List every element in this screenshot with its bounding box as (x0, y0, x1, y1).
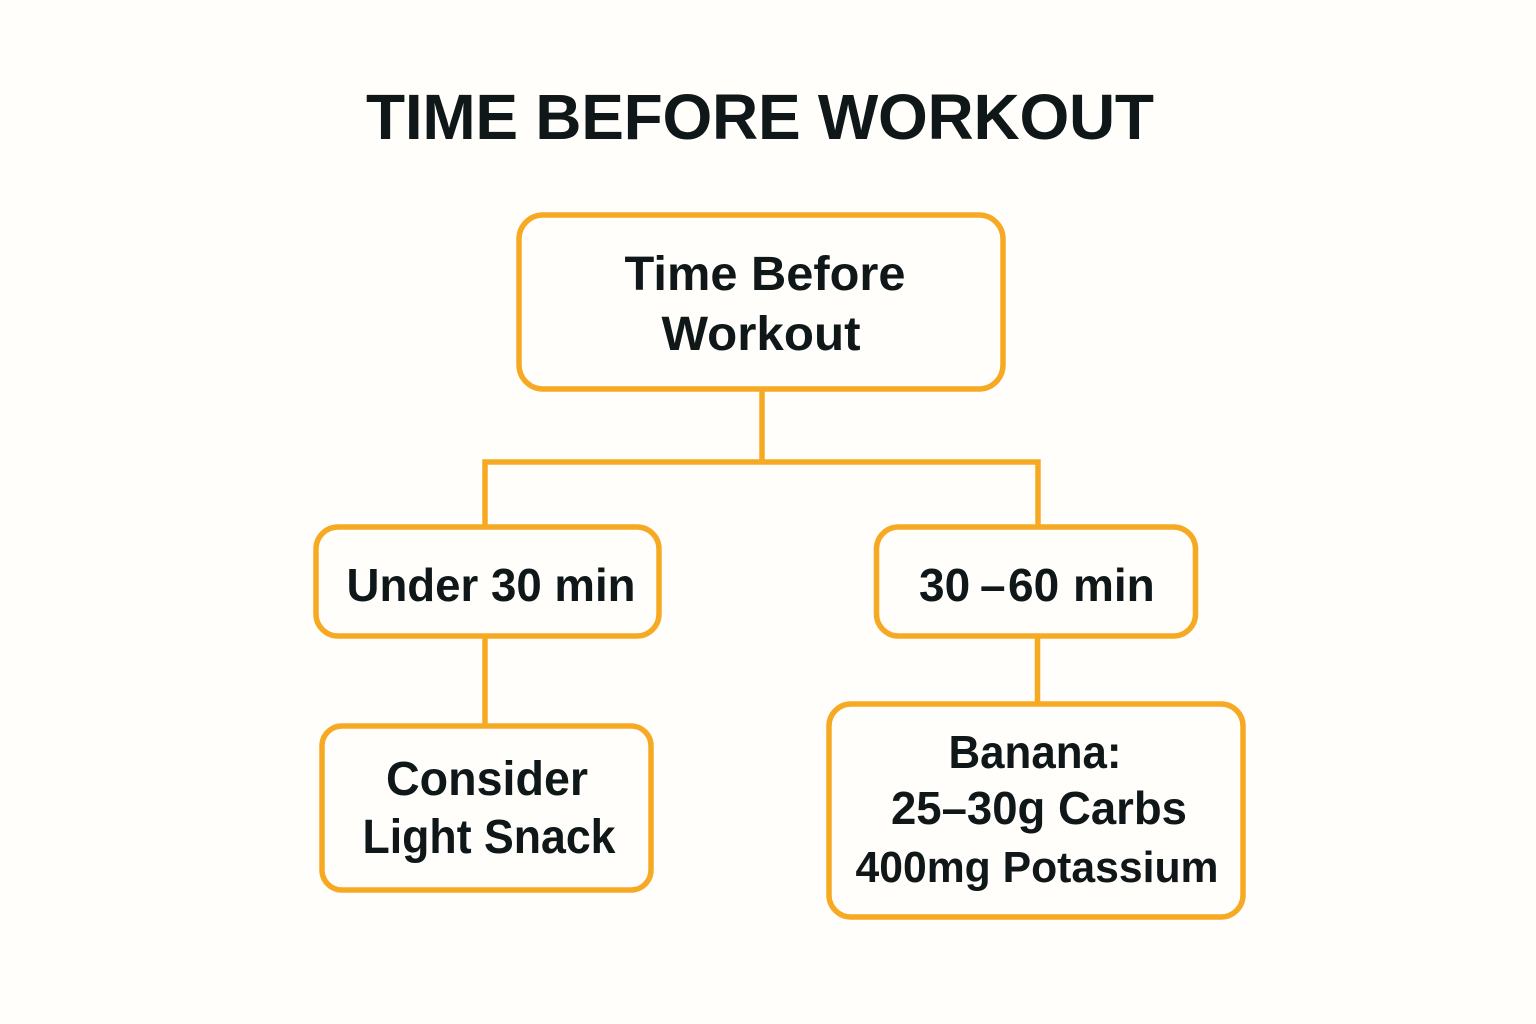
box: banana facts (829, 704, 1243, 917)
box: consider light snack (322, 726, 651, 890)
box: 30-60 min: 30 (919, 559, 970, 611)
connector: under 30 min to light snack (482, 636, 488, 726)
box: banana facts: 25–30g Carbs (891, 782, 1187, 834)
box: banana facts: Banana: (948, 726, 1122, 778)
connector: 30-60 min to banana (1035, 636, 1040, 704)
connector: root to branches (485, 389, 1038, 527)
box: consider light snack: Consider (386, 753, 588, 806)
box: 30-60 min: min (1073, 559, 1155, 611)
box: banana facts: 400mg Potassium (856, 843, 1218, 892)
box: consider light snack: Light Snack (362, 811, 616, 864)
title: TIME BEFORE WORKOUT (366, 81, 1154, 153)
box: under 30 min: Under 30 min (346, 559, 636, 611)
box: 30-60 min: – (980, 559, 1006, 611)
box: under 30 min (316, 527, 659, 636)
box: 30-60 min (876, 527, 1196, 636)
box: time before workout: Workout (662, 308, 861, 361)
box: time before workout: Time Before (624, 248, 906, 301)
box: time before workout (519, 215, 1003, 389)
box: 30-60 min: 60 (1008, 559, 1059, 611)
